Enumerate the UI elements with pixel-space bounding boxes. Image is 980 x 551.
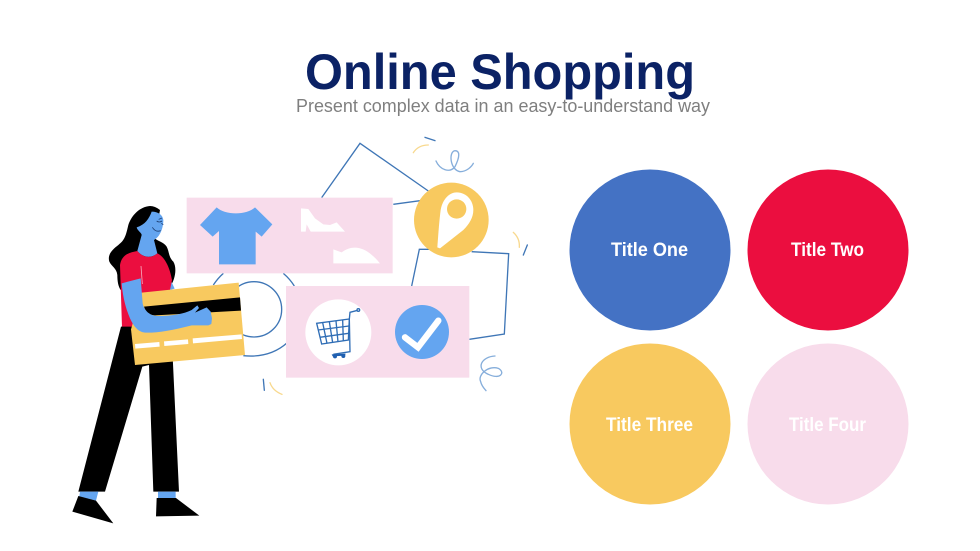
icon: check mark xyxy=(395,305,449,359)
icon: t-shirt xyxy=(200,207,272,264)
title: Online Shopping xyxy=(305,44,695,100)
shirt xyxy=(120,251,172,327)
subtitle: Present complex data in an easy-to-understand way xyxy=(296,96,710,116)
credit card xyxy=(131,283,245,365)
circle: title three: Title Three xyxy=(606,415,693,436)
panel: cart and confirmation xyxy=(286,286,469,378)
decorative squiggles xyxy=(263,137,527,394)
circle: title two xyxy=(748,170,908,330)
sleeve highlight xyxy=(141,266,142,284)
connector lines xyxy=(213,143,509,356)
hair xyxy=(109,206,175,290)
circle: title four: Title Four xyxy=(789,415,867,436)
smile and eye xyxy=(152,218,163,231)
illustration: shopping panels and connectors xyxy=(187,137,527,394)
ankles xyxy=(79,492,176,501)
arm and hand xyxy=(122,278,212,333)
far arm xyxy=(167,277,175,291)
circle: title one xyxy=(570,170,730,330)
icon: high heel shoe xyxy=(301,208,345,232)
face and neck xyxy=(137,212,163,257)
shoes xyxy=(72,496,199,523)
icon: location pin xyxy=(414,183,489,257)
icon: shopping cart xyxy=(305,299,371,365)
panel: clothing products xyxy=(187,198,393,273)
circle: title three xyxy=(570,344,730,504)
circle: title four xyxy=(748,344,908,504)
circle: title one: Title One xyxy=(611,240,688,261)
trousers xyxy=(78,327,179,492)
illustration: woman holding credit card xyxy=(72,206,245,523)
circle: title two: Title Two xyxy=(791,240,864,261)
icon: flat shoe xyxy=(333,248,380,263)
